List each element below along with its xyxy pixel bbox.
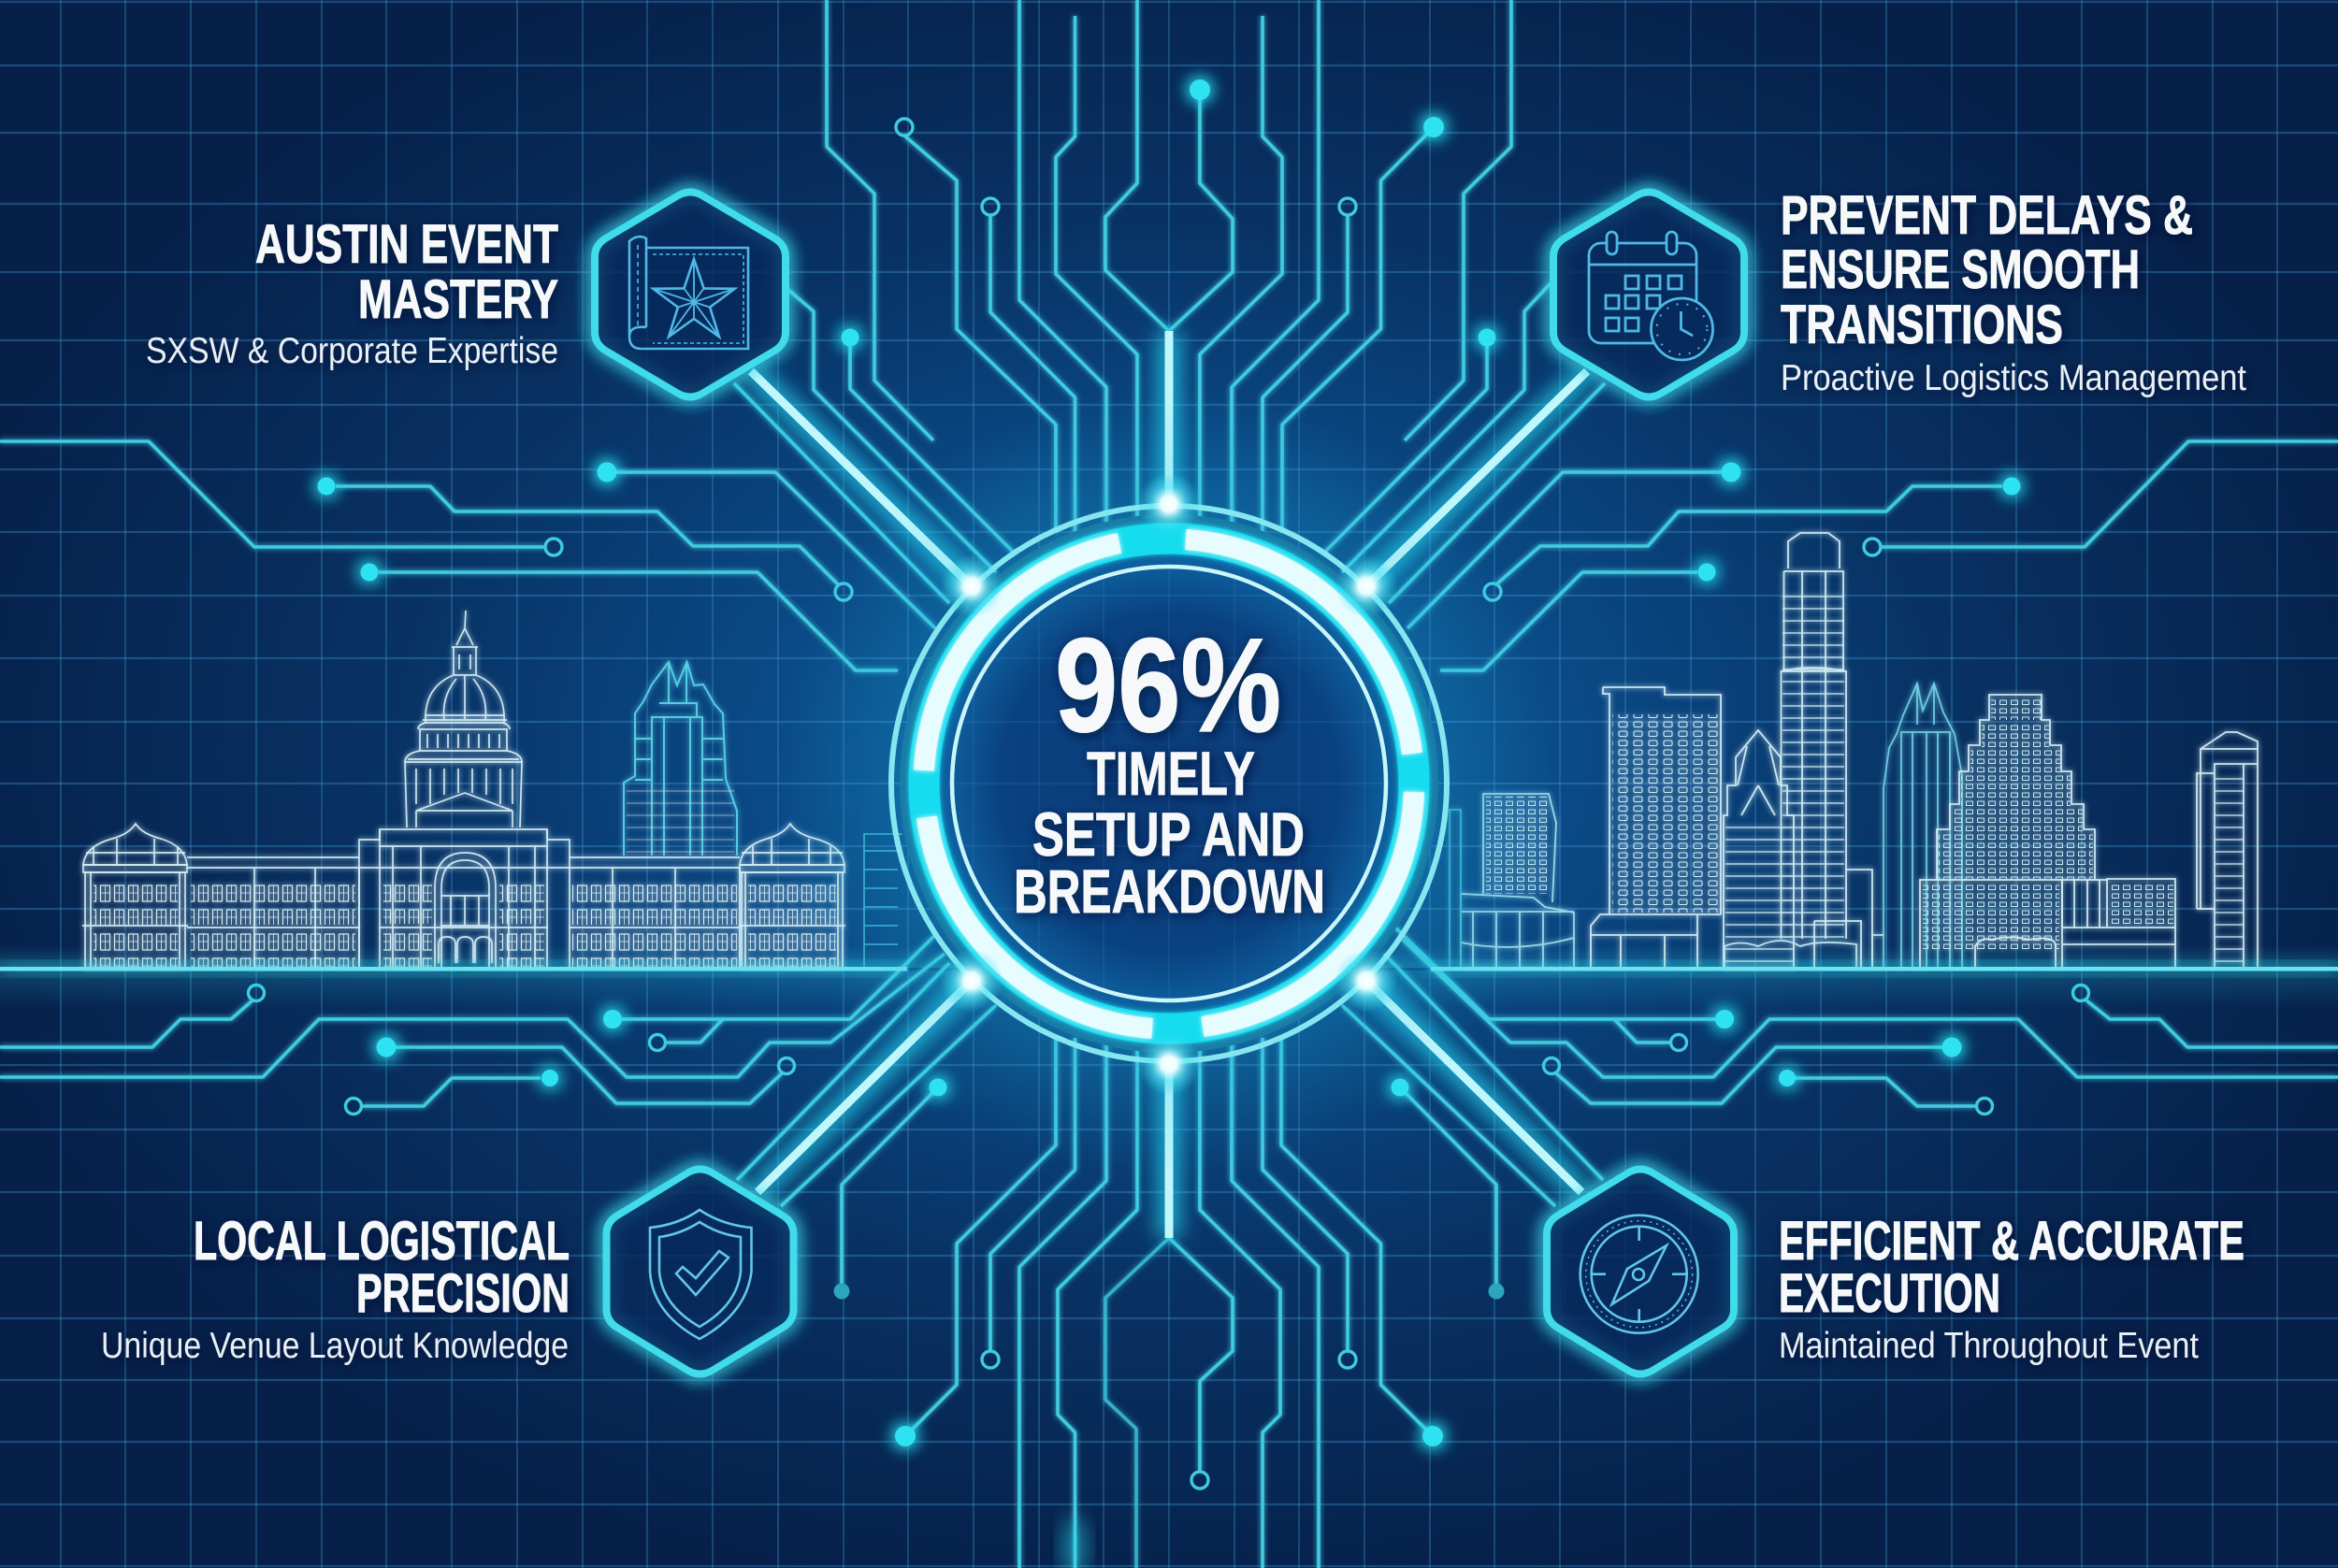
bottom trace glow [1061, 1516, 1088, 1568]
icon: compass [1580, 1216, 1698, 1333]
building: main tower [1781, 533, 1872, 968]
icon: blueprint with star [629, 237, 748, 349]
heading line 2: EXECUTION [1779, 1263, 2000, 1324]
96 percent: 96% [1055, 611, 1281, 760]
text: Austin Event Mastery [146, 214, 558, 371]
timely: TIMELY [1087, 739, 1255, 808]
ground line [0, 963, 2338, 974]
central ring glow [776, 391, 1562, 1176]
heading line 2: ENSURE SMOOTH [1781, 239, 2140, 300]
ground glow [0, 946, 2338, 1008]
text: Efficient and Accurate [1779, 1211, 2244, 1366]
icon: calendar with clock [1589, 232, 1713, 360]
inner disc [935, 550, 1403, 1017]
heading: PREVENT DELAYS & [1781, 185, 2193, 246]
building: triangular crown tower [1724, 730, 1794, 968]
outer thin ring [891, 506, 1447, 1061]
white arc segments [924, 539, 1414, 1029]
breakdown: BREAKDOWN [1014, 856, 1325, 926]
main connectors [751, 331, 1587, 1238]
left background building [864, 834, 902, 968]
subtitle: Proactive Logistics Management [1781, 358, 2246, 398]
building: far right tower [2197, 732, 2258, 968]
cyan band [924, 539, 1414, 1029]
circuit nodes [318, 79, 2020, 1446]
frost tower left [624, 662, 737, 856]
inner thin ring [952, 567, 1386, 1000]
hexagon fill [599, 196, 782, 393]
heading line 2: PRECISION [356, 1263, 570, 1324]
building: tall hotel [1591, 687, 1721, 968]
right skyline [1450, 533, 2258, 968]
hexagon fill [1557, 196, 1740, 393]
ring nodes [940, 472, 1398, 1096]
central stat text [1014, 611, 1325, 926]
text: Prevent Delays [1781, 185, 2246, 398]
building: stepped tower [1937, 695, 2095, 880]
capitol building [82, 611, 845, 968]
hexagon: compass [1547, 1169, 1734, 1374]
open circuit nodes [249, 119, 2089, 1489]
heading line 2: MASTERY [358, 269, 558, 330]
heading: LOCAL LOGISTICAL [194, 1211, 570, 1272]
hexagon: calendar [1553, 193, 1744, 396]
hexagon fill [1551, 1172, 1730, 1371]
connector glow [751, 331, 1587, 1238]
central ring [888, 503, 1450, 1064]
building: buildings by the ring [1450, 810, 1461, 968]
outer ring band [900, 514, 1438, 1053]
heading line 3: TRANSITIONS [1781, 295, 2063, 355]
building: frost tower [1883, 683, 1962, 968]
hexagon: blueprint star [595, 193, 786, 396]
building: low glass block [1461, 794, 1574, 968]
text: Local Logistical Precision [101, 1211, 570, 1366]
subtitle: Unique Venue Layout Knowledge [101, 1326, 569, 1366]
hexagon: shield [606, 1169, 793, 1374]
building: low podium [1920, 879, 2175, 968]
building: street base [1725, 935, 1883, 968]
subtitle: SXSW & Corporate Expertise [146, 331, 558, 371]
heading: AUSTIN EVENT [255, 214, 558, 275]
setup and: SETUP AND [1032, 799, 1305, 869]
icon: shield with check [650, 1210, 752, 1339]
subtitle: Maintained Throughout Event [1779, 1326, 2199, 1366]
hexagon fill [610, 1172, 789, 1371]
